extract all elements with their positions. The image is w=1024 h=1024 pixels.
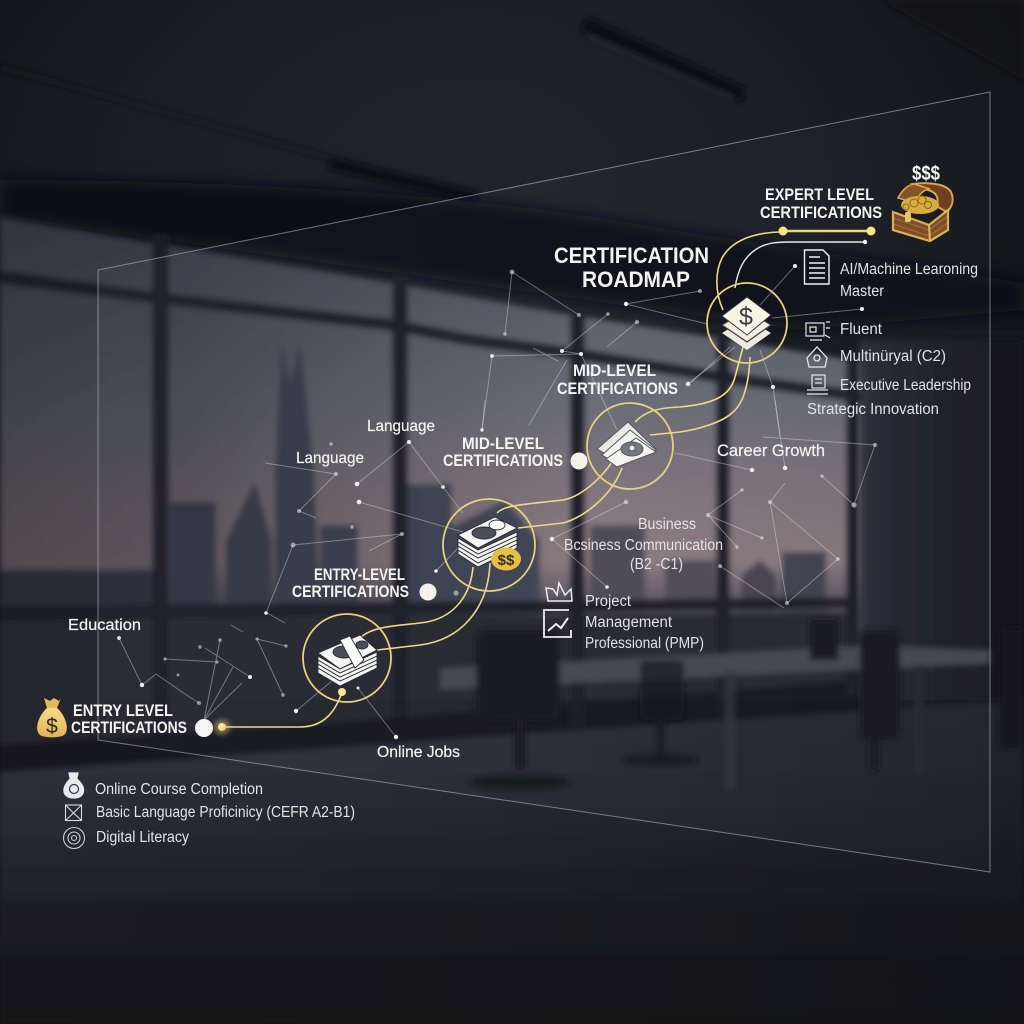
heading: expert level: EXPERT LEVEL [765, 185, 874, 204]
heading: mid-level upper: CERTIFICATIONS [557, 379, 678, 398]
label: career growth: Career Growth [717, 441, 825, 460]
label: education: Education [68, 617, 141, 634]
icon: dollar signs: $$$ [912, 163, 940, 185]
expert list: Master [840, 283, 884, 300]
heading: mid-level lower: CERTIFICATIONS [443, 451, 563, 470]
icon: crown [546, 583, 572, 601]
block: project management: Project [585, 593, 632, 610]
title [554, 243, 709, 292]
icon: house [807, 347, 827, 367]
expert gold nodes [778, 226, 876, 244]
heading: entry level: ENTRY LEVEL [73, 701, 173, 720]
label: language right: Language [367, 418, 435, 435]
icon: server stack [807, 375, 828, 394]
floor [0, 700, 1024, 1024]
expert list: Executive Leadership [840, 377, 971, 394]
block: business communication: Bcsiness Communication [564, 537, 723, 554]
node: mid-level [570, 452, 588, 470]
network lines and nodes [119, 266, 875, 737]
expert list [804, 250, 978, 418]
entry level list: Digital Literacy [96, 829, 189, 846]
icon: chart [544, 610, 571, 637]
icon: banknote stack [318, 635, 377, 686]
window panes and skyline [0, 217, 930, 778]
milestone 2: cash stack with coin [443, 499, 535, 591]
icon: treasure chest [893, 183, 953, 241]
block: business communication: (B2 -C1) [630, 556, 683, 573]
perspective glass panel [98, 92, 990, 872]
table and chairs [440, 620, 1024, 790]
icon: concentric badge [64, 828, 84, 848]
icon: gold money bag: $ [46, 715, 58, 738]
icon: document [804, 250, 829, 284]
icon: gold coin: $$ [498, 552, 515, 569]
expert list: Multinüryal (C2) [840, 348, 946, 365]
icon: dollar stack: $ [739, 303, 753, 331]
heading: mid-level lower: MID-LEVEL [462, 434, 544, 453]
milestone 4: dollar layers [707, 283, 787, 363]
gold node [338, 688, 346, 696]
ceiling fixtures [0, 0, 1024, 202]
heading: entry-level certifications: CERTIFICATIONS [292, 582, 409, 601]
heading: mid-level lower [443, 434, 563, 470]
icon: banknote fan [597, 422, 656, 467]
heading: entry level: CERTIFICATIONS [71, 718, 187, 737]
label: language left: Language [296, 450, 364, 467]
entry level list [64, 773, 355, 848]
block: project management: Professional (PMP) [585, 635, 704, 652]
entry level white node and gold node [195, 719, 230, 737]
block: project management [544, 583, 704, 652]
title: CERTIFICATION [554, 243, 709, 268]
heading: mid-level upper [557, 361, 678, 398]
heading: entry-level certifications [292, 565, 409, 601]
milestone 3: banknotes [587, 403, 673, 489]
heading: mid-level upper: MID-LEVEL [573, 361, 656, 380]
expert list: Fluent [840, 321, 883, 338]
heading: expert level [760, 185, 882, 222]
block: business communication [564, 516, 723, 573]
expert list: Strategic Innovation [807, 401, 939, 418]
icon: computer [806, 322, 830, 340]
heading: expert level: CERTIFICATIONS [760, 203, 882, 222]
block: business communication: Business [638, 516, 696, 533]
entry level list: Basic Language Proficiniсy (CEFR A2-B1) [96, 804, 355, 821]
expert list: AI/Machine Learoning [840, 261, 978, 278]
entry level list: Online Course Completion [95, 781, 263, 798]
right wall [860, 340, 1024, 740]
white roadmap path [735, 242, 865, 288]
gold roadmap path [222, 232, 783, 727]
heading: entry-level certifications: ENTRY-LEVEL [314, 565, 405, 584]
icon: envelope box [66, 805, 82, 820]
node: entry-level [420, 584, 436, 600]
milestone 1: cash stack [303, 614, 391, 702]
icon: money bag outline [64, 773, 84, 798]
label: online jobs: Online Jobs [377, 744, 460, 761]
block: project management: Management [585, 614, 673, 631]
title: ROADMAP [582, 267, 690, 292]
icon: banknote stack [458, 517, 517, 567]
heading: entry level [71, 701, 187, 737]
icon: gold money bag [37, 698, 67, 738]
window frame [0, 235, 930, 765]
